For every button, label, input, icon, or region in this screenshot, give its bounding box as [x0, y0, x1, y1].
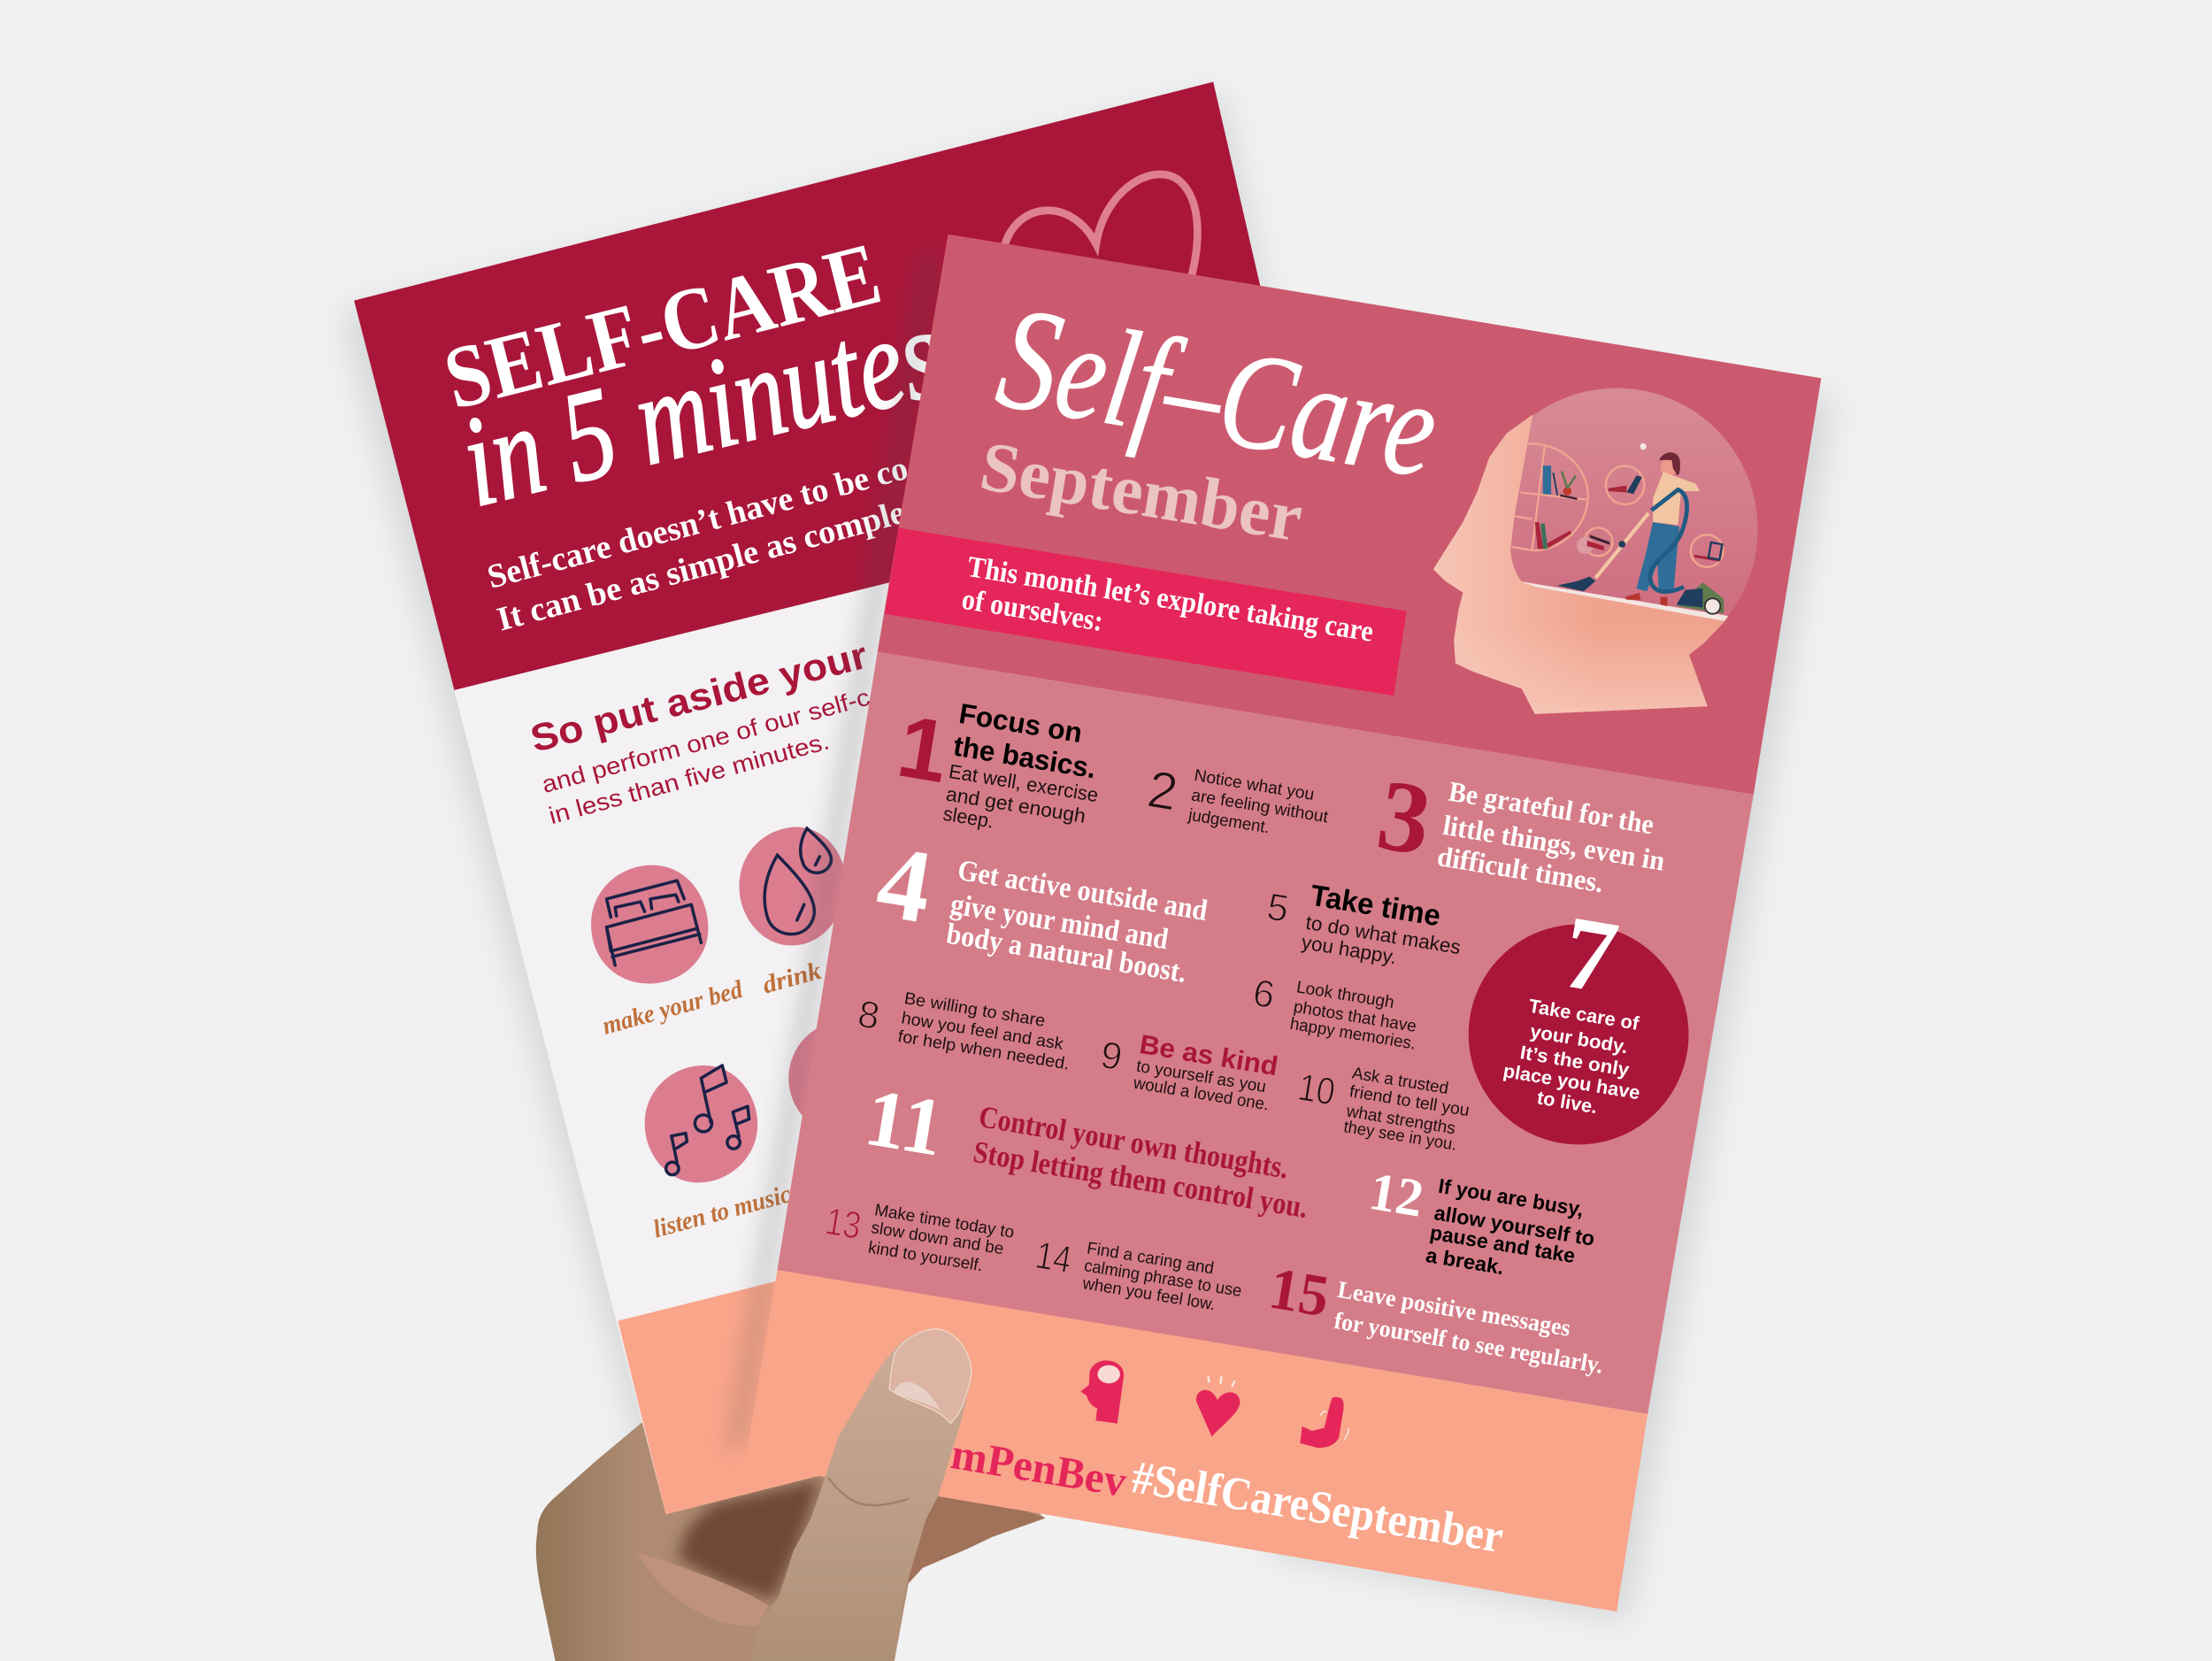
tip 14: 14	[1033, 1234, 1074, 1281]
tip 9: Be as kind	[1138, 1030, 1280, 1081]
back sheet footer band	[618, 1122, 1521, 1514]
footer handle: mPenBev	[948, 1429, 1130, 1506]
tip 3: 3	[1371, 757, 1439, 877]
subtitle month: September	[975, 427, 1308, 557]
icon labels: listen to music	[650, 1180, 794, 1243]
tip 11: Control your own thoughts.	[977, 1099, 1291, 1186]
tip 7 circle: 7	[1555, 894, 1625, 1016]
tip 5	[1264, 880, 1463, 968]
footer hashtag: #SelfCareSeptember	[1128, 1451, 1507, 1563]
tip 12: If you are busy,	[1437, 1174, 1586, 1221]
tip 8: Be willing to share	[902, 989, 1047, 1031]
footer icon: head with brain	[1080, 1360, 1124, 1424]
tip 2: judgement.	[1187, 806, 1271, 837]
tip 12: allow yourself to	[1432, 1201, 1596, 1250]
tip 3: difficult times.	[1435, 841, 1606, 898]
back sheet: self-care in 5 minutes	[354, 81, 1521, 1514]
icon labels: make your bed	[599, 975, 746, 1041]
tip 2: 2	[1144, 759, 1182, 822]
outlined heart	[1004, 174, 1197, 280]
books and plant	[1535, 465, 1722, 562]
tip 13	[822, 1200, 1016, 1275]
tip 1: Focus on	[956, 697, 1085, 749]
tip 6: happy memories.	[1288, 1015, 1417, 1054]
back title: in 5 minutes	[449, 280, 955, 534]
tip 8: how you feel and ask	[900, 1009, 1065, 1054]
tip 10: 10	[1295, 1066, 1338, 1114]
tip 4: give your mind and	[949, 888, 1171, 956]
tip 1: and get enough	[944, 782, 1087, 827]
tip 15: for yourself to see regularly.	[1333, 1307, 1605, 1379]
tip 1: the basics.	[951, 730, 1098, 784]
front sheet shadow on back sheet	[726, 254, 942, 1454]
tip 13: slow down and be	[870, 1219, 1005, 1258]
hand behind sheets	[536, 1397, 1045, 1661]
red banner	[885, 527, 1407, 696]
front header band	[878, 235, 1821, 795]
tip 12: pause and take	[1428, 1220, 1577, 1267]
tip 7 circle: It’s the only	[1518, 1042, 1631, 1080]
tip 13: Make time today to	[873, 1201, 1016, 1242]
tip 3: Be grateful for the	[1447, 776, 1656, 840]
footer icon: flexed arm	[1300, 1397, 1348, 1448]
tip 7 circle: your body.	[1528, 1020, 1630, 1057]
tip 10: friend to tell you	[1348, 1082, 1471, 1120]
tip 1: sleep.	[941, 803, 995, 833]
tip 4: 4	[870, 823, 940, 946]
tip 7 circle	[1469, 894, 1688, 1144]
tip 15: Leave positive messages	[1336, 1276, 1572, 1342]
icon: water drops	[739, 827, 847, 945]
thumbnail	[889, 1329, 972, 1423]
tip 10	[1295, 1065, 1471, 1155]
illustration: head with woman vacuuming	[1433, 388, 1758, 714]
back lead text: So put aside your	[526, 634, 872, 761]
front footer band	[745, 1270, 1647, 1611]
back lead text	[526, 634, 872, 829]
tip 14: Find a caring and	[1086, 1239, 1215, 1279]
knuckle crease	[828, 1478, 909, 1505]
sheet shadows	[342, 93, 1834, 1620]
tip 4	[870, 823, 1210, 989]
tip 12	[1365, 1162, 1596, 1279]
tip 14: calming phrase to use	[1083, 1257, 1243, 1301]
back lead text: and perform one of our self-c	[539, 683, 872, 798]
tip 13: 13	[822, 1200, 864, 1248]
tip 14	[1033, 1234, 1243, 1314]
tip 9: 9	[1097, 1034, 1125, 1079]
tip 5: you happy.	[1300, 931, 1398, 968]
icon labels	[599, 938, 890, 1243]
red banner: This month let’s explore taking care	[965, 550, 1376, 649]
tip 10: what strengths	[1344, 1102, 1456, 1138]
tip 3: little things, even in	[1440, 810, 1667, 877]
tip 11	[859, 1073, 1310, 1225]
tip 10: Ask a trusted	[1351, 1065, 1450, 1098]
bookshelves	[1511, 443, 1724, 567]
tip 6	[1250, 972, 1417, 1054]
tip 5: to do what makes	[1304, 911, 1463, 958]
tip 8	[855, 989, 1071, 1074]
tip 4: body a natural boost.	[944, 918, 1189, 989]
tip 1: 1	[891, 697, 956, 801]
tip 2: are feeling without	[1190, 786, 1330, 827]
back lead text: in less than five minutes.	[546, 727, 832, 829]
tip 2: Notice what you	[1193, 766, 1316, 804]
fourth icon blob (partly hidden)	[788, 1020, 904, 1136]
icon: music notes	[645, 1065, 757, 1182]
tip 11: 11	[859, 1073, 950, 1174]
front sheet: self-care september	[745, 235, 1821, 1611]
tip 9: to yourself as you	[1135, 1057, 1267, 1096]
tip 4: Get active outside and	[956, 854, 1210, 927]
tip 12: a break.	[1425, 1243, 1506, 1279]
tip 1	[891, 697, 1100, 833]
tip 6: 6	[1250, 972, 1278, 1017]
red banner: of ourselves:	[959, 583, 1105, 638]
tip 9: would a loved one.	[1132, 1074, 1271, 1114]
tip 6: photos that have	[1292, 998, 1417, 1036]
tip 3	[1371, 757, 1667, 898]
tip 14: when you feel low.	[1080, 1274, 1217, 1314]
tip 11: Stop letting them control you.	[971, 1134, 1310, 1225]
tip 8: 8	[855, 993, 883, 1038]
tip 12: 12	[1365, 1162, 1427, 1229]
tip 15	[1264, 1256, 1605, 1379]
icon: bed	[591, 865, 708, 984]
back subtitle: Self-care doesn’t have to be co	[483, 450, 911, 596]
tip 15: 15	[1264, 1256, 1333, 1329]
front body band	[778, 652, 1754, 1414]
tip 5: 5	[1264, 886, 1292, 931]
head silhouette	[1433, 414, 1728, 714]
tip 1: Eat well, exercise	[948, 760, 1100, 806]
tip 7 circle: place you have	[1502, 1060, 1641, 1103]
tip 7 circle: to live.	[1535, 1087, 1599, 1118]
tip 9	[1097, 1030, 1280, 1114]
tip 6: Look through	[1295, 978, 1395, 1012]
tip 10: they see in you.	[1342, 1118, 1458, 1155]
icon labels: drink water	[759, 938, 890, 999]
back sheet header band	[354, 81, 1305, 690]
tip 5: Take time	[1308, 880, 1443, 933]
footer icon: heart	[1196, 1377, 1240, 1436]
tip 2	[1144, 759, 1330, 837]
tip 13: kind to yourself.	[867, 1239, 984, 1275]
back title: SELF-CARE	[434, 223, 890, 428]
tip 7 circle: Take care of	[1527, 996, 1641, 1034]
thumb	[751, 1329, 972, 1661]
tip 8: for help when needed.	[896, 1027, 1071, 1074]
back sheet body	[354, 81, 1521, 1514]
main title: Self–Care	[987, 274, 1449, 509]
woman figure	[1557, 443, 1724, 614]
back subtitle: It can be as simple as comple	[493, 494, 909, 639]
